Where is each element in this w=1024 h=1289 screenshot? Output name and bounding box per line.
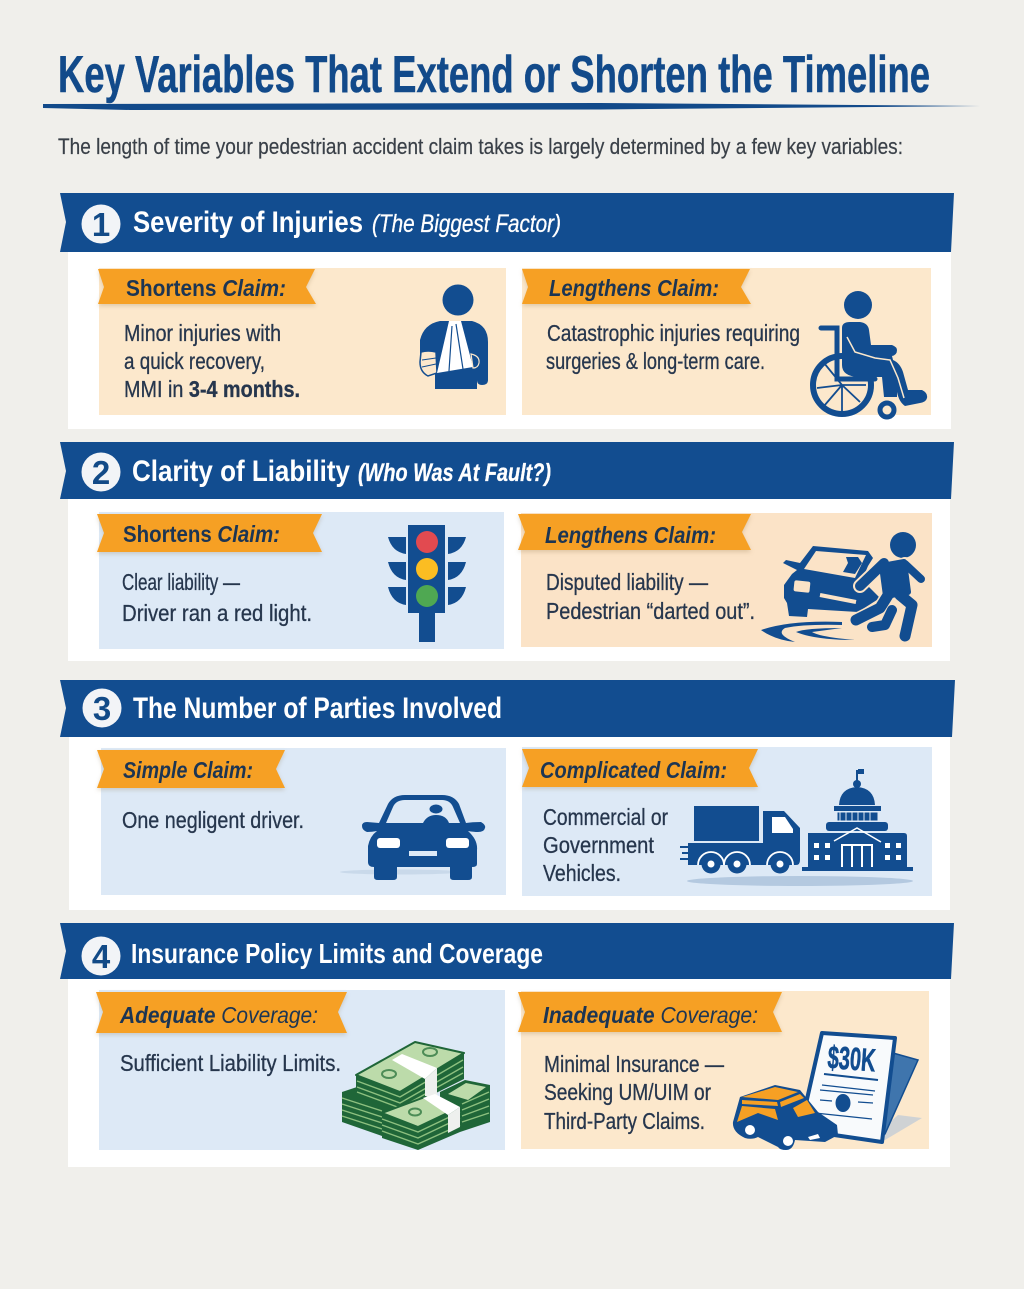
card: minor injuries: MMI in 3-4 months. bbox=[124, 376, 300, 402]
banner 2: Clarity of Liability bbox=[132, 455, 350, 488]
section 2: clarity of liability bbox=[60, 442, 954, 661]
banner 4 bbox=[60, 923, 954, 979]
card: adequate coverage: Adequate Coverage: bbox=[119, 1002, 318, 1028]
card: minor injuries: Minor injuries with bbox=[124, 320, 281, 346]
rear left stack bbox=[342, 1080, 405, 1136]
icon: car and pedestrian bbox=[761, 532, 921, 642]
card: catastrophic injuries: surgeries & long-term care. bbox=[546, 348, 765, 374]
banner 2: 2 bbox=[92, 454, 110, 491]
card: clear liability: Driver ran a red light. bbox=[122, 600, 312, 626]
icon: wheelchair bbox=[813, 291, 927, 417]
card: simple claim: One negligent driver. bbox=[122, 807, 304, 833]
card: complicated claim: Vehicles. bbox=[543, 860, 621, 886]
banner 1: Severity of Injuries bbox=[133, 206, 363, 239]
card: complicated claim: Commercial or bbox=[543, 804, 668, 830]
banner 1: (The Biggest Factor) bbox=[372, 210, 561, 238]
card: simple claim: Simple Claim: bbox=[123, 757, 253, 783]
banner 3 bbox=[60, 680, 955, 737]
card: complicated claim bbox=[522, 747, 932, 896]
card: clear liability: Clear liability — bbox=[122, 569, 240, 595]
banner 3: The Number of Parties Involved bbox=[133, 692, 502, 725]
section 1: severity of injuries bbox=[60, 193, 954, 429]
card: complicated claim: Government bbox=[543, 832, 655, 858]
banner 1 bbox=[60, 193, 954, 252]
card: inadequate coverage: Seeking UM/UIM or bbox=[544, 1079, 711, 1105]
icon: car front bbox=[340, 795, 485, 880]
card: disputed liability: Lengthens Claim: bbox=[545, 522, 716, 548]
card: adequate coverage: Sufficient Liability Limits. bbox=[120, 1050, 341, 1076]
icon: traffic light bbox=[388, 525, 466, 642]
card: minor injuries: a quick recovery, bbox=[124, 348, 265, 374]
upper stack bbox=[356, 1042, 464, 1111]
intro text: The length of time your pedestrian accident claim takes is largely determined by a few key variables: bbox=[58, 134, 903, 159]
card: disputed liability: Disputed liability — bbox=[546, 569, 708, 595]
banner 4: Insurance Policy Limits and Coverage bbox=[131, 938, 543, 969]
rear right stack bbox=[440, 1080, 490, 1132]
card: minor injuries: Shortens Claim: bbox=[126, 275, 286, 301]
banner 2: (Who Was At Fault?) bbox=[358, 459, 551, 487]
section 4: insurance limits bbox=[60, 923, 954, 1167]
icon: policy document: $30K bbox=[827, 1039, 877, 1078]
card: inadequate coverage bbox=[518, 991, 929, 1150]
front stack bbox=[382, 1094, 460, 1150]
card: catastrophic injuries: Lengthens Claim: bbox=[549, 275, 719, 301]
icon: small car bbox=[733, 1085, 838, 1150]
icon: stacks of cash bbox=[342, 1042, 490, 1150]
icon: policy document bbox=[800, 1033, 922, 1142]
card: inadequate coverage: Inadequate Coverage: bbox=[543, 1002, 758, 1028]
card: clear liability bbox=[97, 512, 504, 649]
banner 2 bbox=[60, 442, 954, 499]
icon: government building bbox=[802, 769, 913, 871]
card: inadequate coverage: Third-Party Claims. bbox=[544, 1108, 705, 1134]
card: catastrophic injuries: Catastrophic injuries requiring bbox=[547, 320, 800, 346]
section 3: number of parties bbox=[60, 680, 955, 910]
card: complicated claim: Complicated Claim: bbox=[540, 757, 727, 783]
banner 1: 1 bbox=[92, 206, 110, 243]
card: simple claim bbox=[97, 748, 506, 895]
pedestrian bbox=[856, 562, 921, 636]
card: inadequate coverage: Minimal Insurance — bbox=[544, 1051, 724, 1077]
card: disputed liability bbox=[518, 513, 932, 647]
icon: truck bbox=[680, 806, 913, 886]
card: disputed liability: Pedestrian “darted out”. bbox=[546, 598, 755, 624]
card: adequate coverage bbox=[96, 990, 505, 1150]
banner 4: 4 bbox=[92, 938, 111, 975]
banner 3: 3 bbox=[93, 690, 111, 727]
card: clear liability: Shortens Claim: bbox=[123, 521, 280, 547]
card: catastrophic injuries bbox=[522, 268, 931, 417]
card: minor injuries bbox=[98, 268, 506, 415]
icon: arm sling bbox=[420, 284, 488, 389]
